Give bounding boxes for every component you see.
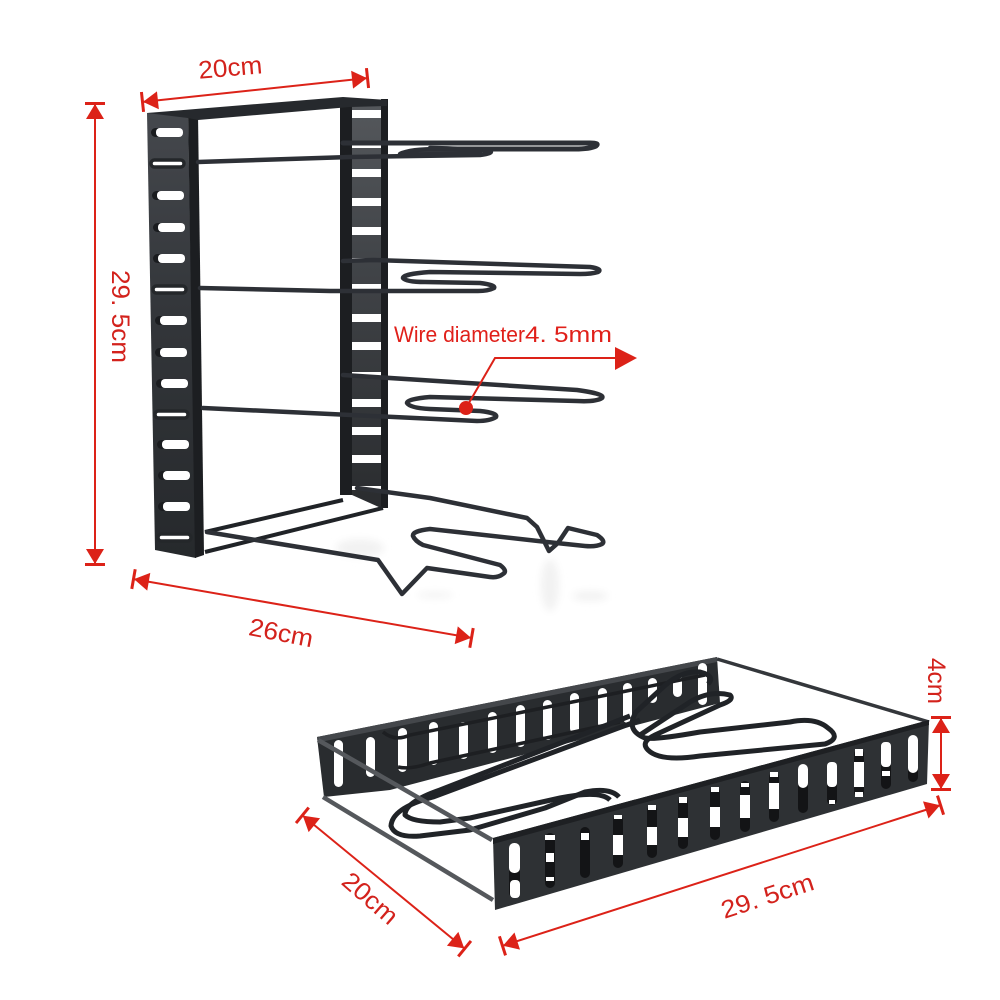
upright rack — [147, 97, 603, 594]
base bars — [205, 500, 383, 552]
shelf wires — [198, 143, 603, 594]
right slotted post — [340, 99, 388, 508]
left slotted post — [147, 112, 204, 558]
floor reflections — [336, 539, 608, 611]
dimension: 20cm side: 20cm — [336, 867, 404, 931]
folded wires — [391, 672, 834, 836]
dimension: 29.5cm width — [502, 805, 941, 946]
dimension: 26cm depth — [133, 579, 472, 653]
top frame bar — [147, 97, 387, 120]
rear slotted rail — [317, 657, 720, 797]
dimension: 20cm side — [302, 815, 465, 949]
dimension: 29.5cm width: 29. 5cm — [718, 868, 818, 925]
side rods — [318, 740, 493, 900]
wires seen through rear rail — [383, 675, 705, 768]
dimension: 4cm: 4cm — [922, 658, 950, 704]
dimension: 20cm top: 20cm — [197, 51, 263, 85]
callout: wire diameter: Wire diameter — [394, 322, 525, 347]
dimension: 29.5cm height: 29. 5cm — [106, 270, 134, 363]
rear right rod — [717, 659, 929, 722]
folded rack — [317, 657, 929, 910]
callout: wire diameter — [394, 322, 637, 415]
dimension: 26cm depth: 26cm — [246, 613, 316, 653]
front slotted rail — [493, 720, 929, 910]
callout: wire diameter: 4. 5mm — [525, 322, 612, 347]
dimension: 20cm top — [142, 51, 368, 102]
dimension: 4cm — [922, 658, 950, 790]
